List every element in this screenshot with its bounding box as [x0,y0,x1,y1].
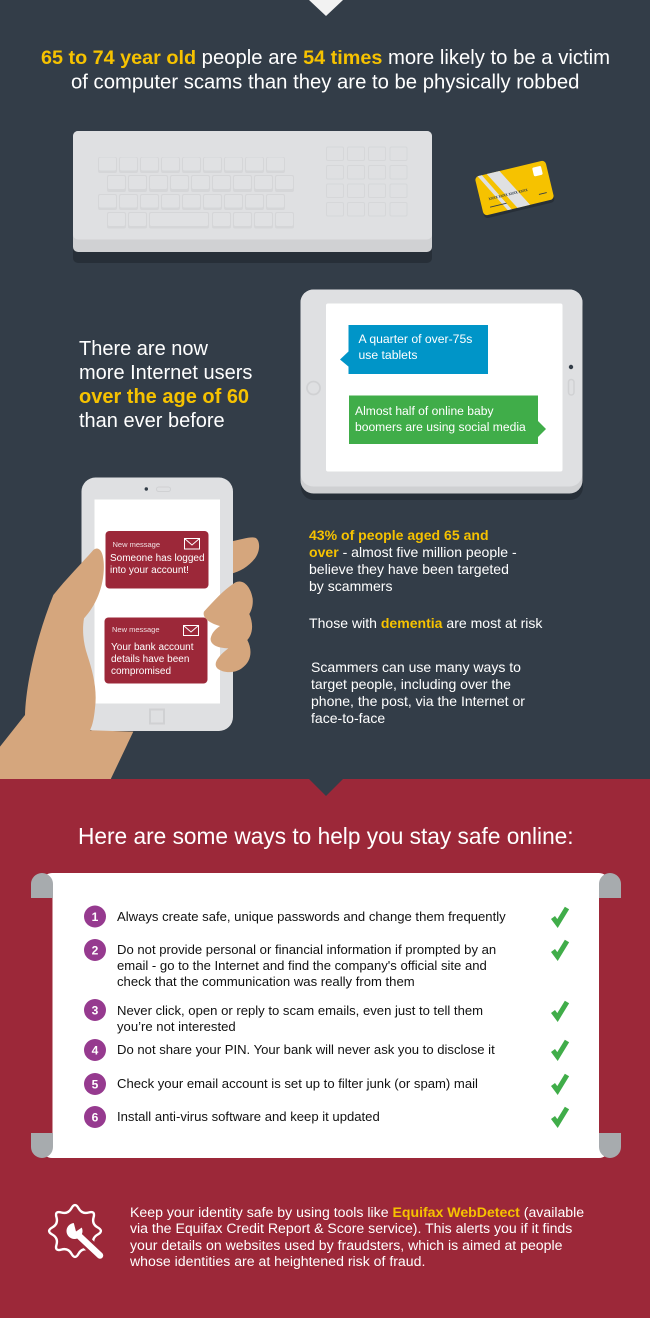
text block: internet users: than ever before [79,410,225,432]
heading: Here are some ways to help you stay safe online: [78,823,574,849]
list item 3: you’re not interested [117,1019,236,1034]
text block: statistics: 43% of people aged 65 and [309,527,489,543]
icon: phone [82,478,233,731]
icon: thumb and palm [0,548,133,779]
list item 1: 1 [92,910,99,924]
icon: section notch [309,779,343,796]
callout: new message two: Your bank account [111,642,194,653]
callout: green social media message: boomers are using social media [355,420,526,434]
text: dementia risk: Those with dementia are most at risk [309,615,543,631]
text: scammer methods: phone, the post, via the Internet or [311,693,525,709]
text block: statistics: over - almost five million people - [309,544,517,560]
text: scammer methods: target people, including over the [311,676,511,692]
callout: new message two [104,618,208,684]
icon: hand holding phone [0,478,259,779]
list item 3 [84,999,567,1034]
icon: gear and wrench [49,1205,102,1257]
text block: internet users: over the age of 60 [79,386,249,408]
title [41,47,610,94]
text block: Equifax WebDetect: whose identities are at heightened risk of fraud. [129,1253,425,1269]
icon: fingers [204,581,253,672]
icon: tablet [300,290,583,500]
text block: internet users: more Internet users [79,362,252,384]
text block: Equifax WebDetect: Keep your identity safe by using tools like Equifax WebDetect (available [130,1204,584,1220]
list item 6: 6 [92,1110,99,1124]
text block: statistics [309,527,543,726]
icon: credit card: XXXX XXXX XXXX XXXX [488,188,528,201]
list item 6 [84,1106,567,1128]
list item 3: Never click, open or reply to scam emails, even just to tell them [117,1003,483,1018]
panel: dark upper background [0,0,650,779]
callout: new message two: details have been [111,654,189,665]
callout: new message one: into your account! [110,565,189,576]
callout: new message one [106,531,208,588]
text: scammer methods: Scammers can use many ways to [311,659,521,675]
title: 65 to 74 year old people are 54 times more likely to be a victim [41,47,610,69]
text: scammer methods: face-to-face [311,710,385,726]
list item 4: 4 [92,1044,99,1058]
panel: scroll checklist [30,873,623,1158]
callout: new message two: compromised [111,666,171,677]
icon: far finger [230,537,259,574]
icon: top notch [309,0,343,16]
list item 5: Check your email account is set up to filter junk (or spam) mail [117,1076,478,1091]
callout: blue tablets message: use tablets [358,348,417,362]
list item 6: Install anti-virus software and keep it updated [117,1109,380,1124]
list item 1 [84,906,567,928]
list item 1: Always create safe, unique passwords and change them frequently [117,909,506,924]
panel: red lower background [0,779,650,1318]
text block: Equifax WebDetect: via the Equifax Credit Report & Score service). This alerts you if it finds [130,1220,572,1236]
list item 4: Do not share your PIN. Your bank will never ask you to disclose it [117,1042,495,1057]
callout: green social media message: Almost half of online baby [355,404,494,418]
list item 2: Do not provide personal or financial information if prompted by an [117,942,496,957]
text block: statistics: by scammers [309,578,393,594]
list item 2 [84,939,567,989]
callout: blue tablets message [340,325,488,374]
title: of computer scams than they are to be physically robbed [71,72,579,94]
list item 5 [84,1073,567,1095]
text block: Equifax WebDetect: your details on websites used by fraudsters, which is aimed at people [130,1237,563,1253]
text block: Equifax WebDetect [129,1204,584,1269]
text block: internet users: There are now [79,338,209,360]
list item 2: check that the communication was really from them [117,974,415,989]
list item 2: email - go to the Internet and find the company's official site and [117,958,487,973]
list item 2: 2 [92,944,99,958]
text block: statistics: believe they have been targeted [309,561,509,577]
text: scammer methods [311,659,525,726]
list item 4 [84,1039,567,1061]
text block: internet users [79,338,252,432]
list item 3: 3 [92,1004,99,1018]
list item 5: 5 [92,1078,99,1092]
callout: green social media message [349,396,546,444]
icon: credit card [474,159,555,219]
icon: keyboard [73,131,432,263]
callout: new message one: Someone has logged [110,553,205,564]
callout: new message two: New message [112,625,160,634]
callout: new message one: New message [112,540,160,549]
callout: blue tablets message: A quarter of over-75s [358,332,472,346]
